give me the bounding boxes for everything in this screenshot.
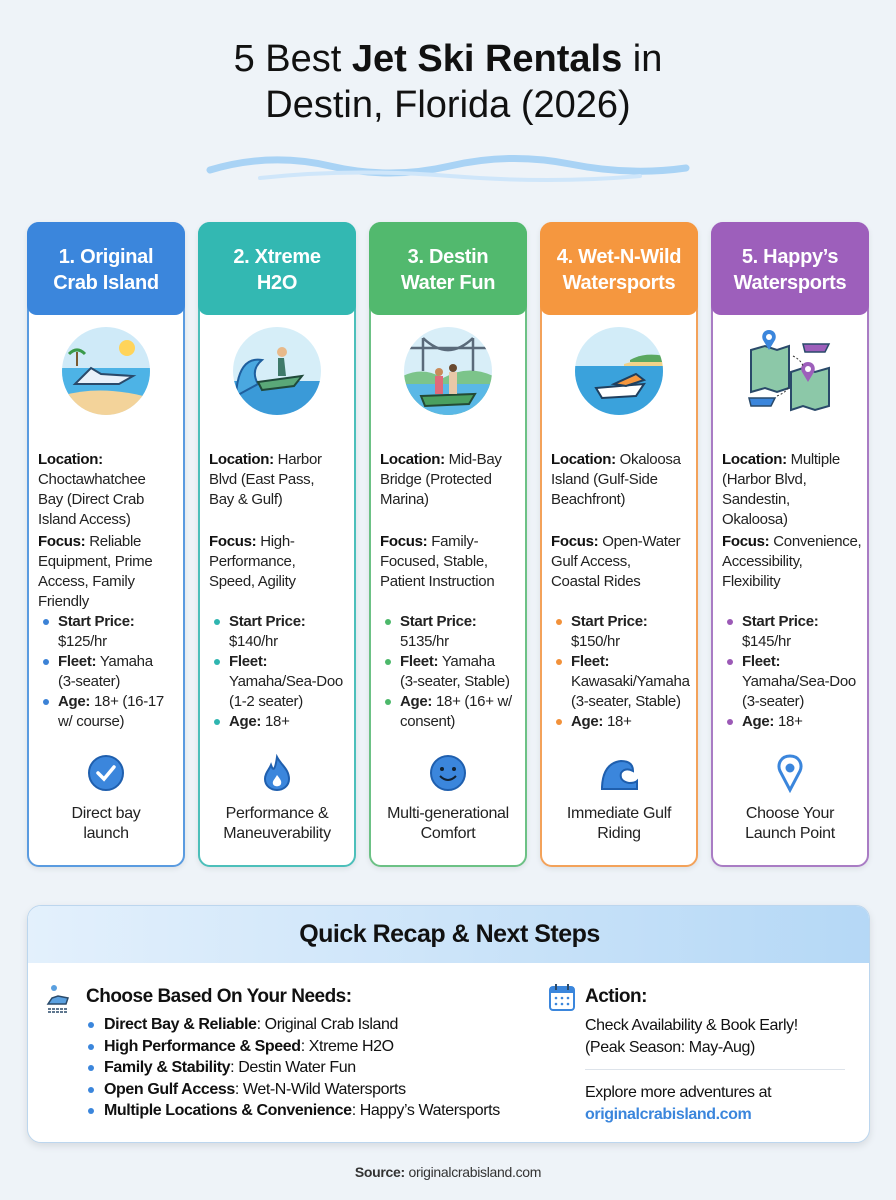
icon: flame [264, 754, 290, 791]
icon: bridge family ride [404, 327, 492, 415]
card 5 caption [745, 805, 836, 842]
panel: card 4 Wet-N-Wild Watersports: Gulf Access, [551, 553, 631, 570]
card 4 location & focus: Location: Okaloosa [551, 451, 681, 468]
card 4 caption: Immediate Gulf [567, 805, 671, 822]
card 5 bullets: Fleet: [742, 653, 780, 670]
card 2 bullets: (1-2 seater) [229, 693, 303, 710]
card 1 header: 1. Original [59, 246, 153, 268]
card 5 header [711, 222, 869, 315]
panel: card 1 Original Crab Island [27, 222, 185, 867]
recap: choose based on needs: Choose Based On Your Needs: [86, 986, 352, 1007]
card 5 caption: Launch Point [745, 825, 835, 842]
panel: card 5 Happy's Watersports: Focus: Convenience, [722, 533, 861, 550]
card 3 bullets: (3-seater, Stable) [400, 673, 510, 690]
panel: card 1 Original Crab Island: Friendly [38, 593, 89, 610]
icon: gulf jet ski [575, 327, 663, 415]
icon: jet ski small [46, 985, 69, 1013]
panel: card 4 Wet-N-Wild Watersports: Focus: Open-Water [551, 533, 680, 550]
card 3 header: 3. Destin [408, 246, 488, 268]
card 3 bullets: Start Price: [400, 613, 476, 630]
panel: card 1 Original Crab Island: Equipment, Prime [38, 553, 152, 570]
card 4 bullets: (3-seater, Stable) [571, 693, 681, 710]
card 5 bullets: Start Price: [742, 613, 818, 630]
card 5 bullets: $145/hr [742, 633, 791, 650]
action text: Check Availability & Book Early! [585, 1017, 798, 1034]
card 5 location & focus: Okaloosa) [722, 511, 788, 528]
card 3 bullets: Fleet: Yamaha [400, 653, 495, 670]
card 4 header [540, 222, 698, 315]
card 2 bullets [214, 613, 343, 730]
card 3 location & focus [380, 451, 502, 508]
explore link: originalcrabisland.com [585, 1106, 751, 1123]
icon: calendar [549, 984, 575, 1011]
card 3 header [369, 222, 527, 315]
panel: card 5 Happy's Watersports: Flexibility [722, 573, 780, 590]
icon: wave rider [233, 327, 321, 415]
card 3 caption: Multi-generational [387, 805, 509, 822]
card 1 header: Crab Island [53, 272, 159, 294]
action text [585, 1017, 798, 1056]
panel: card 2 Xtreme H2O [198, 222, 356, 867]
card 2 location & focus: Location: Harbor [209, 451, 322, 468]
recap list: High Performance & Speed: Xtreme H2O [104, 1038, 394, 1055]
card 5 location & focus: (Harbor Blvd, [722, 471, 806, 488]
card 1 bullets: Start Price: [58, 613, 134, 630]
card 1 caption: launch [83, 825, 129, 842]
card 4 location & focus: Beachfront) [551, 491, 625, 508]
wave decoration [206, 155, 690, 182]
card 4 bullets: Fleet: [571, 653, 609, 670]
source: Source: originalcrabisland.com [355, 1164, 541, 1180]
card 1 caption: Direct bay [71, 805, 141, 822]
card 4 bullets: Age: 18+ [571, 713, 632, 730]
card 2 location & focus: Blvd (East Pass, [209, 471, 314, 488]
panel: card 3 Destin Water Fun: Focused, Stable, [380, 553, 488, 570]
card 3 bullets [385, 613, 512, 730]
card 5 location & focus [722, 451, 840, 528]
card 4 header: Watersports [563, 272, 675, 294]
card 5 caption: Choose Your [746, 805, 834, 822]
card 5 bullets [727, 613, 856, 730]
action text: (Peak Season: May-Aug) [585, 1039, 755, 1056]
icon: wave [601, 760, 638, 790]
card 1 bullets: $125/hr [58, 633, 107, 650]
icon: location pin [777, 754, 803, 793]
recap: action: Action: [585, 986, 647, 1007]
panel: card 5 Happy's Watersports [711, 222, 869, 867]
card 1 location & focus [38, 451, 146, 528]
card 3 bullets: Age: 18+ (16+ w/ [400, 693, 512, 710]
card 1 location & focus: Choctawhatchee [38, 471, 146, 488]
card 4 caption: Riding [597, 825, 641, 842]
panel: card 3 Destin Water Fun: Focus: Family- [380, 533, 478, 550]
card 2 bullets: Fleet: [229, 653, 267, 670]
card 4 location & focus: Island (Gulf-Side [551, 471, 658, 488]
recap list: Multiple Locations & Convenience: Happy’s Watersports [104, 1102, 500, 1119]
card 1 location & focus: Bay (Direct Crab [38, 491, 144, 508]
panel: card 1 Original Crab Island: Focus: Reliable [38, 533, 141, 550]
card 2 bullets: $140/hr [229, 633, 278, 650]
card 4 location & focus [551, 451, 681, 508]
card 2 bullets: Start Price: [229, 613, 305, 630]
explore link: Explore more adventures at [585, 1084, 771, 1101]
icon: maps and pins [748, 330, 830, 412]
panel: card 1 Original Crab Island: Access, Family [38, 573, 135, 590]
card 5 bullets: (3-seater) [742, 693, 804, 710]
card 3 location & focus: Marina) [380, 491, 429, 508]
card 3 header: Water Fun [401, 272, 495, 294]
card 2 caption: Performance & [226, 805, 328, 822]
recap heading: Quick Recap & Next Steps [299, 920, 600, 948]
card 1 location & focus: Location: [38, 451, 103, 468]
card 5 location & focus: Sandestin, [722, 491, 790, 508]
card 1 bullets: Age: 18+ (16-17 [58, 693, 164, 710]
card 2 caption: Maneuverability [223, 825, 331, 842]
card 1 header [27, 222, 185, 315]
card 3 location & focus: Location: Mid-Bay [380, 451, 502, 468]
panel: card 4 Wet-N-Wild Watersports [540, 222, 698, 867]
recap list: Direct Bay & Reliable: Original Crab Island [104, 1016, 398, 1033]
card 4 bullets: Start Price: [571, 613, 647, 630]
card 3 bullets: consent) [400, 713, 455, 730]
card 2 header: 2. Xtreme [233, 246, 321, 268]
card 2 bullets: Yamaha/Sea-Doo [229, 673, 343, 690]
card 3 bullets: 5135/hr [400, 633, 449, 650]
card 5 header: Watersports [734, 272, 846, 294]
panel: quick recap [27, 905, 870, 1143]
card 2 caption [223, 805, 332, 842]
icon: smiley [430, 755, 466, 791]
card 2 bullets: Age: 18+ [229, 713, 290, 730]
title: Destin, Florida (2026) [265, 84, 631, 126]
card 2 location & focus [209, 451, 322, 508]
card 1 bullets: w/ course) [58, 713, 124, 730]
explore link [585, 1084, 772, 1123]
card 1 bullets: (3-seater) [58, 673, 120, 690]
card 2 header: H2O [257, 272, 297, 294]
recap list [88, 1016, 500, 1119]
panel: card 3 Destin Water Fun [369, 222, 527, 867]
panel: card 5 Happy's Watersports: Accessibility, [722, 553, 803, 570]
title: 5 Best Jet Ski Rentals in [234, 38, 662, 80]
card 4 bullets [556, 613, 690, 730]
card 5 location & focus: Location: Multiple [722, 451, 840, 468]
card 1 caption [71, 805, 141, 842]
card 5 bullets: Yamaha/Sea-Doo [742, 673, 856, 690]
recap list: Family & Stability: Destin Water Fun [104, 1059, 356, 1076]
card 4 caption [567, 805, 672, 842]
card 1 location & focus: Island Access) [38, 511, 131, 528]
title [234, 38, 662, 126]
card 5 bullets: Age: 18+ [742, 713, 803, 730]
panel: card 2 Xtreme H2O: Performance, [209, 553, 295, 570]
icon: check [88, 755, 124, 791]
card 3 location & focus: Bridge (Protected [380, 471, 492, 488]
panel: card 4 Wet-N-Wild Watersports: Coastal Rides [551, 573, 640, 590]
card 4 bullets: $150/hr [571, 633, 620, 650]
card 3 caption [387, 805, 509, 842]
card 4 header: 4. Wet-N-Wild [557, 246, 681, 268]
card 1 bullets: Fleet: Yamaha [58, 653, 153, 670]
panel: card 2 Xtreme H2O: Speed, Agility [209, 573, 296, 590]
panel: card 2 Xtreme H2O: Focus: High- [209, 533, 295, 550]
card 2 header [198, 222, 356, 315]
card 2 location & focus: Bay & Gulf) [209, 491, 282, 508]
card 3 caption: Comfort [421, 825, 475, 842]
recap list: Open Gulf Access: Wet-N-Wild Watersports [104, 1081, 406, 1098]
icon: jet ski on beach [62, 327, 150, 415]
panel: card 3 Destin Water Fun: Patient Instruction [380, 573, 494, 590]
card 5 header: 5. Happy’s [742, 246, 838, 268]
card 4 bullets: Kawasaki/Yamaha [571, 673, 690, 690]
card 1 bullets [43, 613, 164, 730]
recap heading [28, 906, 871, 963]
